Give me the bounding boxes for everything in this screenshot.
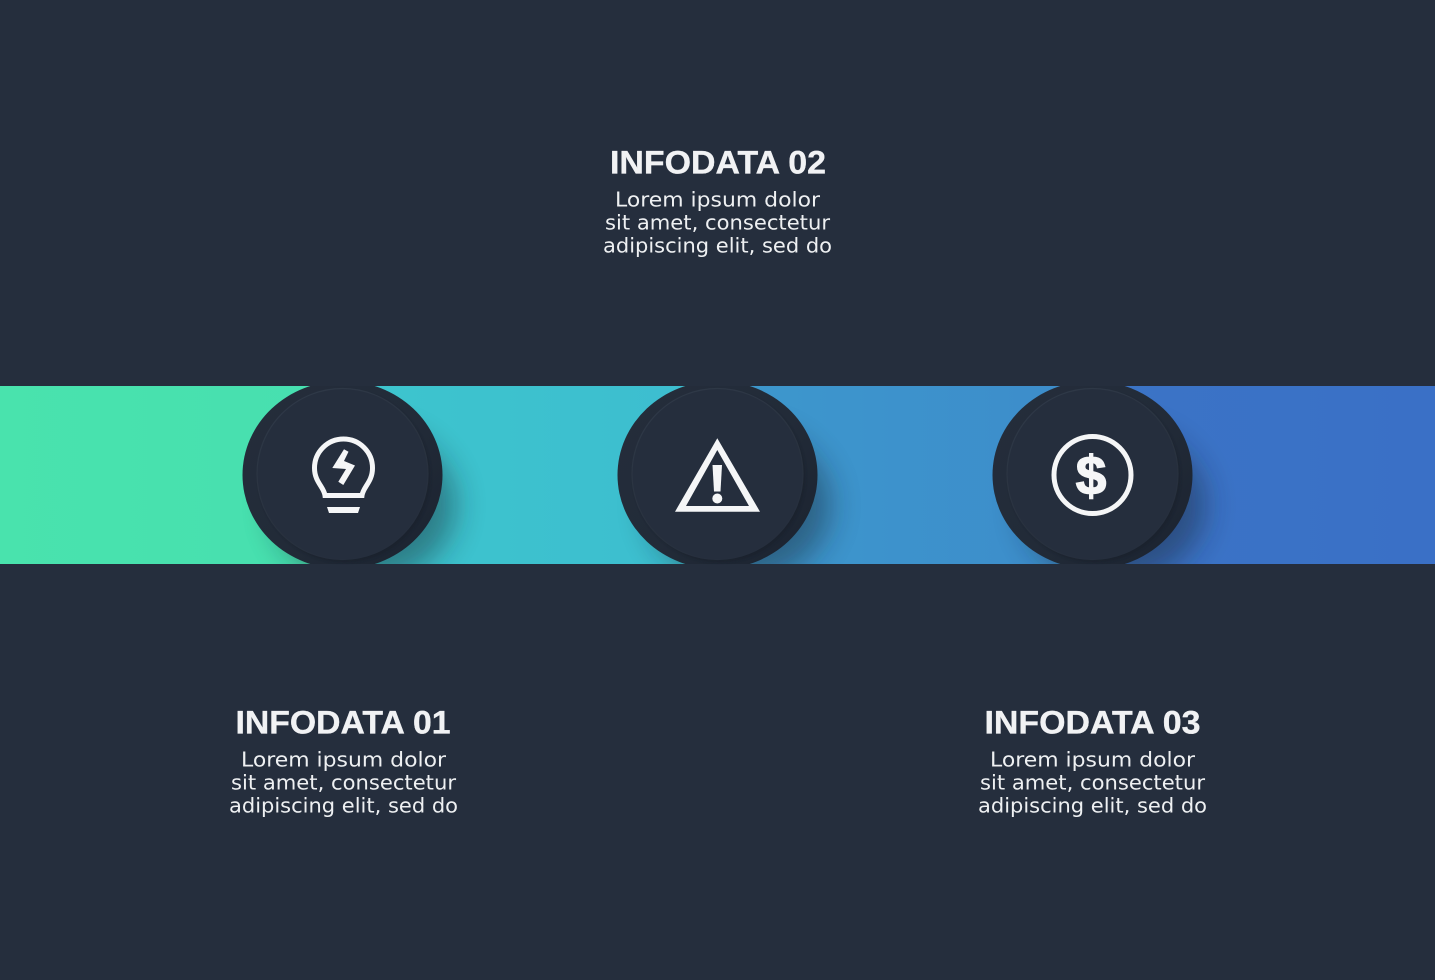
text block: infodata 02 (603, 144, 832, 258)
text block: infodata 01 (229, 704, 458, 818)
text block: infodata 01: adipiscing elit, sed do (229, 794, 458, 818)
gradient band (0, 386, 1435, 564)
icon: dollar coin: $ (1076, 444, 1106, 506)
text block: infodata 02: adipiscing elit, sed do (603, 234, 832, 258)
infographic (0, 150, 1435, 817)
text block: infodata 01: Lorem ipsum dolor (241, 748, 447, 772)
text block: infodata 02: Lorem ipsum dolor (615, 188, 821, 212)
step 3 circle (992, 381, 1206, 583)
text block: infodata 03: sit amet, consectetur (980, 770, 1206, 794)
text block: infodata 01: INFODATA 01 (236, 704, 450, 740)
step 2 circle (618, 381, 831, 583)
text block: infodata 02: sit amet, consectetur (605, 210, 831, 234)
icon: light bulb (314, 439, 372, 513)
text block: infodata 03 (978, 704, 1207, 818)
icon: warning triangle (675, 438, 760, 512)
text block: infodata 03: INFODATA 03 (984, 704, 1200, 740)
text block: infodata 03: Lorem ipsum dolor (990, 748, 1196, 772)
text block: infodata 03: adipiscing elit, sed do (978, 794, 1207, 818)
text block: infodata 01: sit amet, consectetur (231, 770, 457, 794)
icon: dollar coin (1054, 436, 1131, 514)
step 1 circle (242, 381, 456, 583)
text block: infodata 02: INFODATA 02 (610, 144, 826, 180)
